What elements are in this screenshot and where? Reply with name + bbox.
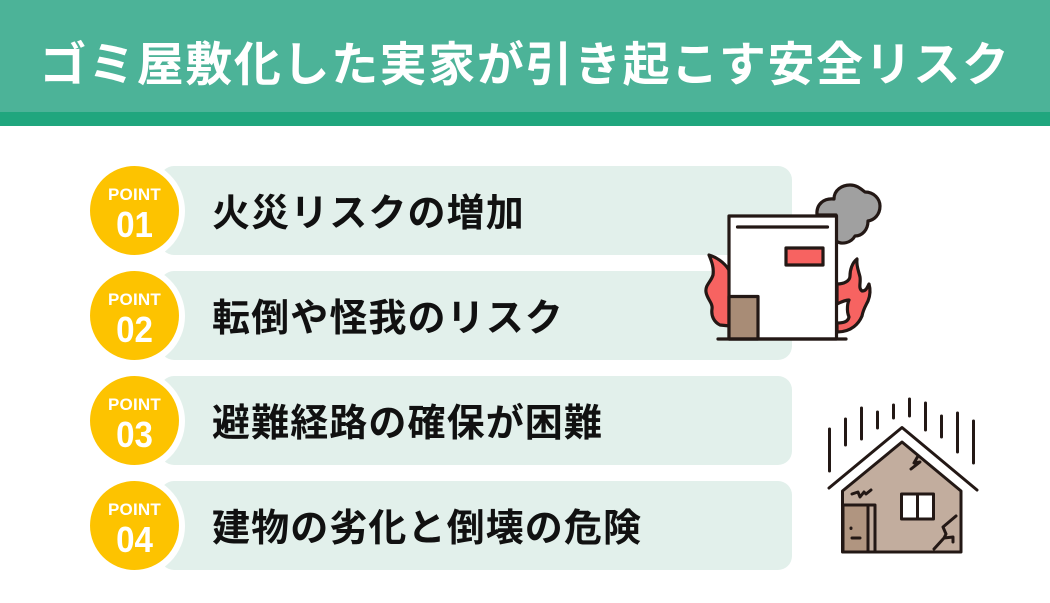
badge: point 04: [90, 481, 179, 570]
heading: building deterioration: 建物の劣化と倒壊の危険: [212, 508, 642, 550]
panel: point 03 bar: [160, 376, 792, 465]
icon: burning building: [706, 185, 880, 339]
badge: point 01: POINT: [108, 185, 161, 204]
badge: point 02: [90, 271, 179, 360]
icon: left flame: [706, 255, 730, 326]
panel: point 01 bar: [160, 166, 792, 255]
icon: damaged house: [829, 399, 977, 552]
badge ring 02: [83, 265, 185, 367]
icon: house window: [902, 494, 934, 519]
heading: evacuation route: 避難経路の確保が困難: [212, 403, 603, 445]
badge: point 04: POINT: [108, 500, 161, 519]
icon: smoke: [817, 185, 880, 243]
badge: point 01: [90, 166, 179, 255]
badge: point 03: [90, 376, 179, 465]
badge: point 04: 04: [116, 519, 153, 560]
panel: point 04 bar: [160, 481, 792, 570]
icon: house roof: [829, 428, 977, 490]
icon: falling debris lines: [830, 399, 974, 471]
icon: house wall: [842, 442, 961, 552]
icon: building roof line: [738, 225, 828, 229]
icon: right flame: [837, 259, 870, 332]
icon: red window: [786, 248, 823, 265]
icon: building wall: [729, 216, 836, 339]
title banner: [0, 0, 1050, 126]
icon: wall cracks: [852, 456, 956, 549]
panel: point 02 bar: [160, 271, 792, 360]
icon: door handle: [851, 528, 860, 538]
icon: door panel: [843, 505, 868, 552]
badge ring 01: [83, 160, 185, 262]
badge: point 01: 01: [116, 204, 153, 245]
icon: ground line: [718, 337, 846, 341]
badge: point 03: POINT: [108, 395, 161, 414]
icon: brown door: [729, 296, 758, 339]
heading: fall and injury risk: 転倒や怪我のリスク: [212, 298, 564, 340]
badge: point 03: 03: [116, 414, 153, 455]
badge ring 03: [83, 370, 185, 472]
badge: point 02: POINT: [108, 290, 161, 309]
icon: door frame: [843, 505, 875, 552]
title: ゴミ屋敷化した実家が引き起こす安全リスク: [39, 38, 1011, 91]
badge ring 04: [83, 475, 185, 577]
heading: fire risk: 火災リスクの増加: [212, 193, 525, 235]
badge: point 02: 02: [116, 309, 153, 350]
